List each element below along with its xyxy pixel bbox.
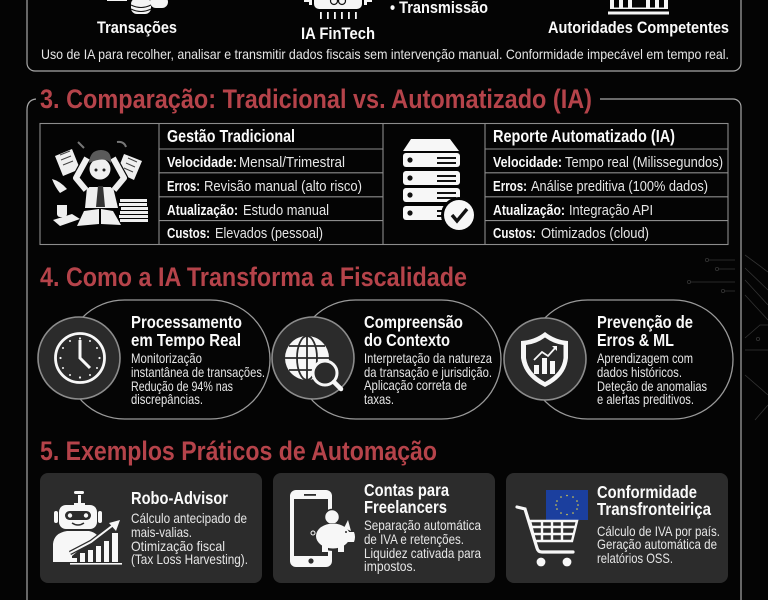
text: Processamento xyxy=(131,312,265,407)
text: Processamento: em Tempo Real xyxy=(131,330,241,350)
text: Prevenção: Aprendizagem com xyxy=(597,350,693,366)
text: Prevenção: e alertas preditivos. xyxy=(597,391,694,407)
column: Reporte Automatizado: Otimizados (cloud) xyxy=(541,226,649,242)
label: Transações: Transações xyxy=(97,18,177,37)
text: Compreensão: taxas. xyxy=(364,391,394,407)
text: Contas para Freelancers: Freelancers xyxy=(364,497,447,517)
column: Reporte Automatizado xyxy=(493,126,723,242)
text: Contas para Freelancers: de IVA e retenções. xyxy=(364,531,464,547)
icon: shopping cart with EU flag xyxy=(517,490,588,566)
column: Gestão Tradicional: Estudo manual xyxy=(243,203,329,219)
icon: shield with chart xyxy=(521,332,568,387)
icon: clock xyxy=(56,334,104,382)
label: Autoridades Competentes: Autoridades Competentes xyxy=(548,18,729,37)
text: Contas para Freelancers: Liquidez cativada para xyxy=(364,545,481,561)
text: Compreensão: da transação e jurisdição. xyxy=(364,364,492,380)
column: Reporte Automatizado: Integração API xyxy=(569,203,653,219)
icon: phone with piggy bank xyxy=(290,490,355,567)
column: Reporte Automatizado: Custos: xyxy=(493,226,536,242)
text: Prevenção: dados históricos. xyxy=(597,364,682,380)
heading: section 5: 5. Exemplos Práticos de Automação xyxy=(40,436,437,466)
text: Conformidade Transfronteiriça: Geração automática de xyxy=(597,536,717,552)
text: Robo-Advisor: Cálculo antecipado de xyxy=(131,510,247,526)
text: Contas para Freelancers: Separação automática xyxy=(364,517,481,533)
column: Reporte Automatizado: Erros: xyxy=(493,179,527,195)
column: Reporte Automatizado: Velocidade: xyxy=(493,155,562,171)
card: Robo-Advisor xyxy=(40,473,262,583)
icon: robot with growth chart xyxy=(53,491,122,565)
text: Robo-Advisor: (Tax Loss Harvesting). xyxy=(131,551,248,567)
text: Prevenção: Prevenção de xyxy=(597,312,693,332)
card: Compreensão do Contexto xyxy=(272,300,501,419)
text: Compreensão xyxy=(364,312,492,407)
text: Conformidade Transfronteiriça: relatórios OSS. xyxy=(597,550,673,566)
icon: authority building xyxy=(608,0,669,14)
text: Conformidade Transfronteiriça: Cálculo de IVA por país. xyxy=(597,523,720,539)
text: Processamento: Monitorização xyxy=(131,350,202,366)
column: Gestão Tradicional xyxy=(167,126,362,242)
text: Compreensão: Interpretação da natureza xyxy=(364,350,492,366)
panel: top flow section xyxy=(27,0,741,71)
text: Compreensão: Aplicação correta de xyxy=(364,377,467,393)
column: Gestão Tradicional: Mensal/Trimestral xyxy=(239,155,345,171)
column: Gestão Tradicional: Atualização: xyxy=(167,203,238,219)
column: Reporte Automatizado: Tempo real (Milissegundos) xyxy=(565,155,723,171)
column: Gestão Tradicional: Revisão manual (alto risco) xyxy=(204,179,362,195)
text: Compreensão: do Contexto xyxy=(364,330,450,350)
card: Processamento em Tempo Real xyxy=(38,300,270,419)
column: Reporte Automatizado: Reporte Automatizado (IA) xyxy=(493,126,675,146)
column: Gestão Tradicional: Custos: xyxy=(167,226,210,242)
decorative circuit lines xyxy=(687,255,768,420)
text: Prevenção: Erros & ML xyxy=(597,330,674,350)
panel: section 3-5 outer frame xyxy=(27,99,741,600)
text: Processamento: instantânea de transações. xyxy=(131,364,265,380)
text: Robo-Advisor xyxy=(131,488,248,567)
text: Processamento: Processamento xyxy=(131,312,242,332)
text: Processamento: discrepâncias. xyxy=(131,391,203,407)
column: Gestão Tradicional: Gestão Tradicional xyxy=(167,126,295,146)
icon: globe with magnifier xyxy=(285,336,341,389)
text: Robo-Advisor: Robo-Advisor xyxy=(131,488,228,508)
card: Contas para Freelancers xyxy=(273,473,495,583)
comparison table xyxy=(40,124,728,244)
text: Contas para Freelancers: impostos. xyxy=(364,558,416,574)
icon: transaction coins xyxy=(107,0,168,14)
label: IA FinTech: IA FinTech xyxy=(301,24,375,43)
text: Processamento: Redução de 94% nas xyxy=(131,378,233,394)
icon: server with check mark xyxy=(403,139,477,233)
text: Robo-Advisor: Otimização fiscal xyxy=(131,538,225,554)
column: Gestão Tradicional: Elevados (pessoal) xyxy=(215,226,323,242)
text: Compreensão: Compreensão xyxy=(364,312,463,332)
text: Contas para Freelancers: Contas para xyxy=(364,480,449,500)
text: Contas para Freelancers xyxy=(364,480,481,574)
heading: section 3: 3. Comparação: Tradicional vs. Automatizado (IA) xyxy=(40,84,592,114)
card: Conformidade Transfronteiriça xyxy=(506,473,728,583)
column: Gestão Tradicional: Velocidade: xyxy=(167,155,237,171)
heading: section 4: 4. Como a IA Transforma a Fiscalidade xyxy=(40,262,467,292)
card: Prevenção de Erros e ML xyxy=(504,300,733,419)
icon: AI chip xyxy=(304,0,372,19)
text: Conformidade Transfronteiriça xyxy=(597,482,720,566)
icon: stressed worker with papers xyxy=(52,142,148,226)
column: Reporte Automatizado: Análise preditiva (100% dados) xyxy=(531,179,708,195)
text: Conformidade Transfronteiriça: Transfronteiriça xyxy=(597,499,711,519)
column: Reporte Automatizado: Atualização: xyxy=(493,203,565,219)
text: Prevenção: Deteção de anomalias xyxy=(597,378,707,394)
text: Conformidade Transfronteiriça: Conformidade xyxy=(597,482,697,502)
text: Prevenção xyxy=(597,312,707,407)
column: Gestão Tradicional: Erros: xyxy=(167,179,200,195)
text: Robo-Advisor: mais-valias. xyxy=(131,524,192,540)
